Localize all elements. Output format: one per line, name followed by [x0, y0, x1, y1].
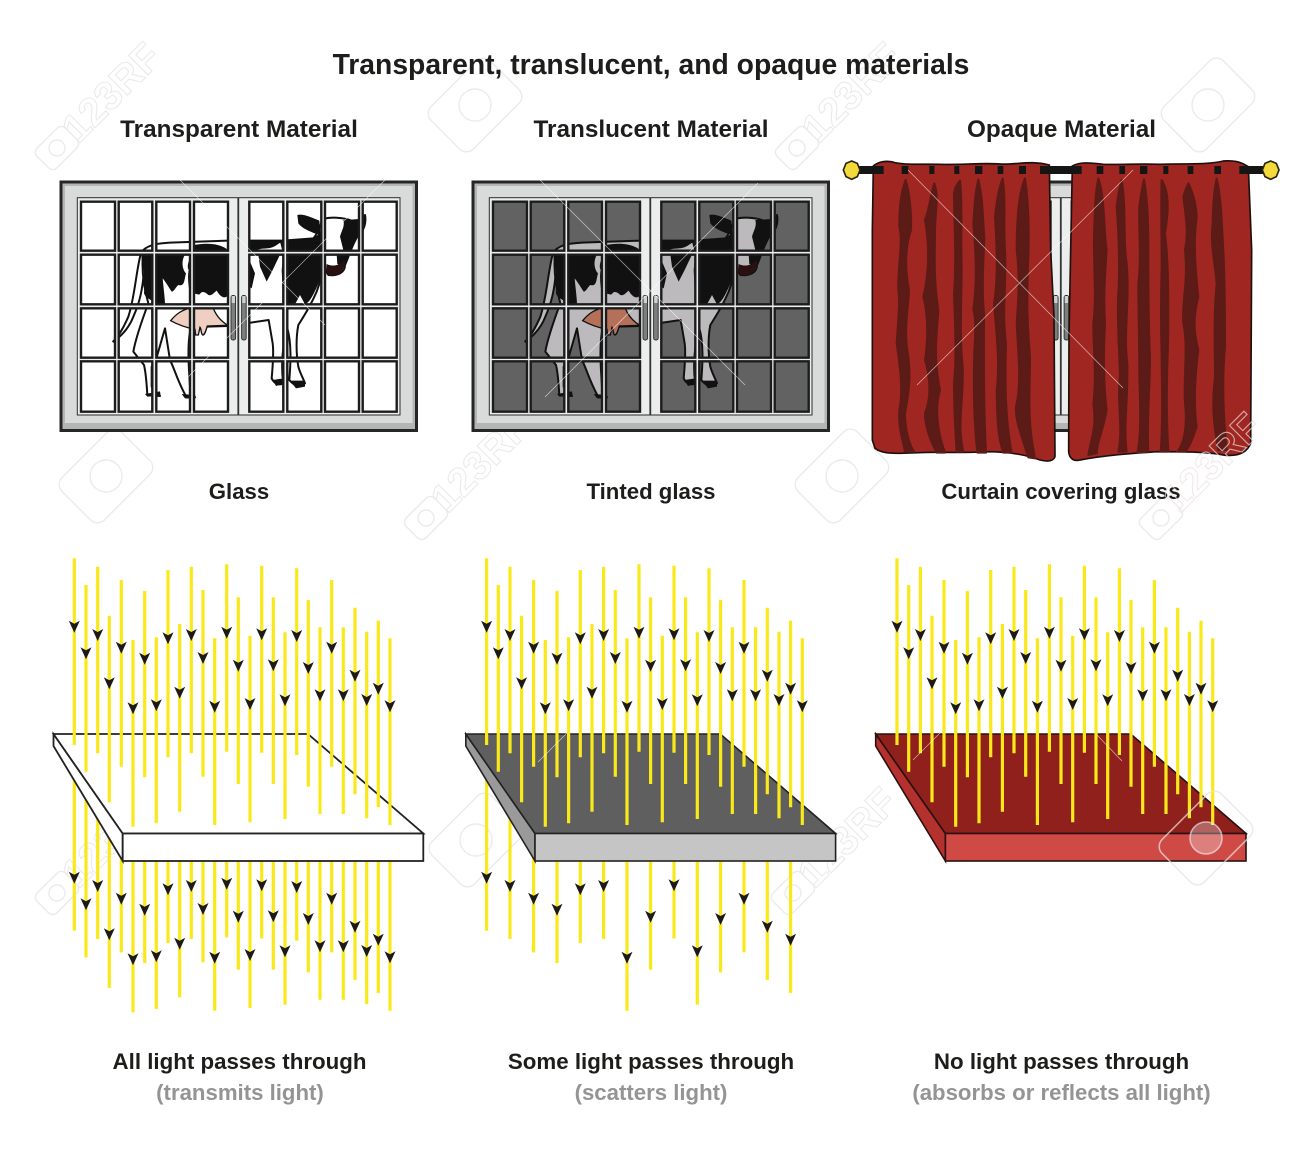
diagram: light through clear slab [54, 558, 423, 1012]
incoming light rays [69, 558, 396, 827]
watermark marks behind the artwork: 123RF [790, 780, 906, 896]
result text: no light: No light passes through [934, 1049, 1189, 1074]
finial right [1262, 161, 1279, 179]
slab: tinted glass [466, 734, 836, 861]
left curtain [872, 161, 1055, 461]
caption: glass: Glass [209, 479, 269, 504]
result text: some light: Some light passes through [508, 1049, 794, 1074]
window: behind the curtain [882, 180, 1240, 432]
heading: opaque material: Opaque Material [967, 116, 1156, 143]
incoming light rays [892, 558, 1218, 827]
watermark marks behind the artwork: 123RF [423, 405, 539, 521]
curtain with rod and finials [843, 161, 1279, 461]
heading: transparent material: Transparent Material [120, 116, 358, 143]
diagram: light blocked by opaque slab [876, 558, 1246, 861]
watermark marks over the artwork [180, 170, 1271, 889]
watermark marks behind the artwork: 123RF [54, 780, 170, 896]
note: scatters light: (scatters light) [575, 1080, 727, 1105]
watermark marks over the artwork: 123RF [1155, 405, 1271, 521]
heading: translucent material: Translucent Material [534, 116, 768, 143]
watermark marks behind the artwork: 123RF [794, 35, 910, 151]
window: clear glass with cow [60, 180, 418, 432]
diagram: light through tinted slab [466, 558, 836, 1011]
slab: clear glass [54, 734, 423, 861]
right curtain [1069, 161, 1252, 460]
slab: opaque [876, 734, 1246, 861]
watermark marks behind the artwork: 123RF [54, 35, 170, 151]
incoming light rays [481, 558, 808, 827]
watermark marks behind the artwork [33, 35, 1259, 917]
title: Transparent, translucent, and opaque materials [333, 48, 969, 80]
curtain rod [858, 166, 1263, 174]
caption: curtain covering glass: Curtain covering glass [941, 479, 1181, 504]
note: transmits light: (transmits light) [156, 1080, 324, 1105]
caption: tinted glass: Tinted glass [586, 479, 716, 504]
result text: all light: All light passes through [113, 1049, 366, 1074]
window: tinted glass with cow [472, 180, 830, 432]
note: absorbs or reflects: (absorbs or reflects all light) [912, 1080, 1211, 1105]
finial left [843, 161, 860, 179]
